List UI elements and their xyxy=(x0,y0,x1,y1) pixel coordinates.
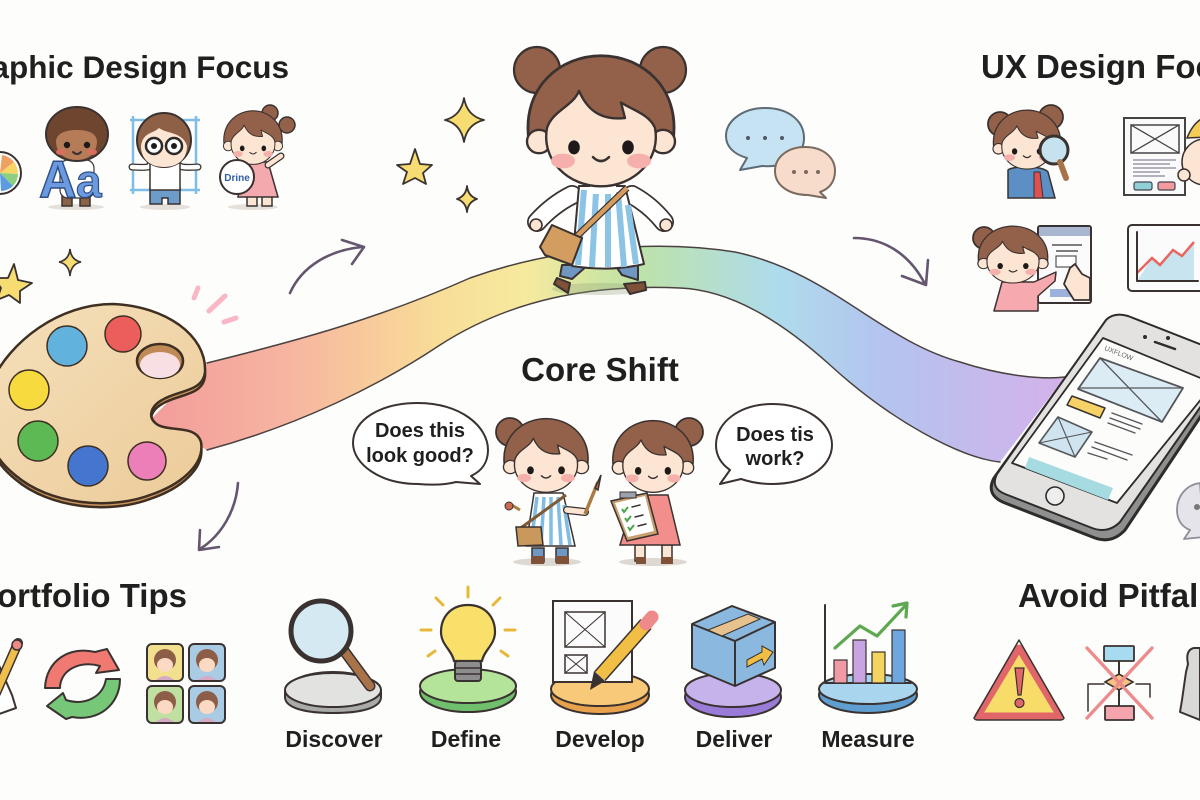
ribbon: rainbow path xyxy=(150,246,1065,462)
icon: warning triangle xyxy=(974,640,1064,720)
arrow: palette to graphic focus xyxy=(290,240,364,293)
accent marks near palette xyxy=(194,288,236,322)
palette paints xyxy=(9,316,183,486)
character: graphic designer with brush xyxy=(496,418,601,566)
step: Measure: Measure xyxy=(821,726,915,752)
arrow: to portfolio tips xyxy=(199,483,238,550)
icon: iteration arrows xyxy=(45,649,120,719)
phone: UXFLOW xyxy=(1103,345,1134,363)
step: Develop: Develop xyxy=(555,726,645,752)
analytics chart panel xyxy=(1128,225,1200,291)
icon: crossed out flowchart xyxy=(1087,646,1152,720)
apron xyxy=(572,186,644,269)
icon: user portraits xyxy=(147,644,225,723)
icon: notebook and pencil xyxy=(0,640,22,718)
step: Measure xyxy=(819,603,917,752)
decoration: stars upper left xyxy=(0,249,81,303)
character: layout grid kid with glasses xyxy=(130,113,200,210)
panel: portfolio icons xyxy=(0,640,225,723)
phone screen xyxy=(1012,338,1200,503)
clipboard xyxy=(611,493,658,541)
callout: UX designer question xyxy=(716,404,832,484)
arms xyxy=(537,195,572,222)
palette xyxy=(0,304,205,507)
step: Discover xyxy=(285,601,383,752)
panel: pitfall icons xyxy=(974,640,1200,720)
stars near main character xyxy=(397,98,484,212)
arrow: to UX focus xyxy=(854,238,928,285)
step: Deliver xyxy=(685,606,781,752)
character: logo kid with buns: Drine xyxy=(224,173,250,184)
panel: graphic design characters xyxy=(0,105,295,210)
wireframe sheet xyxy=(1124,118,1185,195)
callout: graphic designer question: Does this xyxy=(375,420,465,442)
ribbon edges xyxy=(207,246,1065,462)
callout: UX designer question: Does tis xyxy=(736,424,814,446)
panel: UX design vignettes xyxy=(973,105,1200,311)
character: logo kid with buns xyxy=(220,105,295,210)
character: color wheel holder xyxy=(0,152,21,194)
character: UX designer with clipboard xyxy=(611,418,703,566)
step: Deliver: Deliver xyxy=(696,726,772,752)
character: typography kid with Aa xyxy=(39,107,108,210)
character: typography kid with Aa: a xyxy=(76,155,102,207)
step: Define: Define xyxy=(431,726,501,752)
satchel xyxy=(575,188,627,238)
head xyxy=(514,47,560,93)
character: usability testing xyxy=(973,226,1091,311)
speech bubbles: UX chatter xyxy=(726,108,835,198)
step: Discover: Discover xyxy=(285,726,383,752)
panel: process steps xyxy=(285,587,917,752)
callout: graphic designer question: look good? xyxy=(366,445,474,467)
step: Define xyxy=(420,587,516,752)
heading: Core Shift: Core Shift xyxy=(521,351,679,388)
main character xyxy=(514,47,686,295)
phone xyxy=(991,315,1200,540)
icon: grey monument xyxy=(1180,648,1200,720)
callout: graphic designer question xyxy=(353,403,488,485)
step: Develop xyxy=(551,601,652,752)
character: hard hat partner xyxy=(1178,116,1200,185)
legs xyxy=(560,265,638,280)
callout: UX designer question: work? xyxy=(745,448,804,470)
character: typography kid with Aa: A xyxy=(39,151,77,209)
chat bubble by phone xyxy=(1177,483,1200,539)
character: research with magnifier xyxy=(988,105,1068,198)
